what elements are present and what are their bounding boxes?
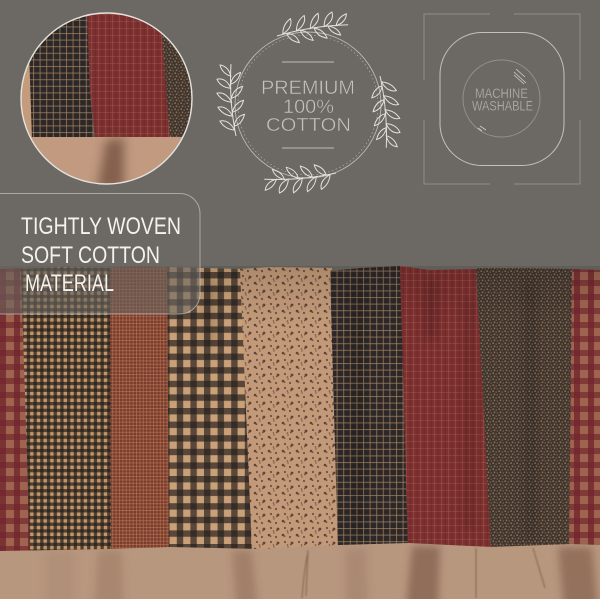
fabric strip: red plaid right: [569, 269, 600, 552]
rounded square: [440, 32, 564, 166]
fabric strip: navy check: [330, 266, 409, 552]
fabric strip: red plaid left: [0, 268, 32, 552]
premium text: 100%: [283, 97, 334, 118]
callout panel: [0, 194, 200, 314]
premium text: COTTON: [266, 115, 351, 135]
rules: [282, 62, 334, 148]
panel box: [0, 194, 200, 314]
circle: brown dotted: [162, 34, 192, 137]
circle: ring: [21, 13, 192, 184]
fabric strip: red check: [400, 266, 492, 552]
circle: navy check: [28, 10, 94, 140]
badge: premium cotton: [215, 9, 402, 195]
glints: [478, 69, 526, 131]
fabric strip: rust check: [110, 266, 170, 552]
callout text: MATERIAL: [25, 270, 114, 297]
callout text: SOFT COTTON: [21, 242, 160, 269]
machine washable text: [472, 86, 533, 114]
circle: ruffle fold: [97, 138, 124, 190]
wreath circle: [235, 32, 381, 178]
wreath branches: [215, 9, 402, 195]
fabric strip: small gingham: [21, 267, 112, 552]
callout text: [21, 213, 181, 297]
callout text: TIGHTLY WOVEN: [21, 213, 181, 240]
fabric strip: floral tan: [240, 267, 339, 552]
detail circle: [20, 10, 195, 190]
premium text: PREMIUM: [261, 78, 355, 99]
curtain photo: [0, 266, 600, 599]
premium text: [261, 78, 355, 135]
circle: ruffle: [32, 137, 182, 184]
machine washable text: WASHABLE: [472, 98, 533, 114]
circle: red check: [87, 10, 170, 140]
fabric strip: brown dotted: [476, 268, 572, 552]
badge: machine washable: [424, 14, 580, 184]
circle: tan sliver: [22, 63, 32, 137]
corner frame: [424, 14, 580, 184]
inner circle: [463, 60, 540, 137]
top gathers shading: [0, 266, 600, 324]
fabric folds: [205, 280, 535, 540]
fabric strip: large gingham: [167, 267, 258, 552]
ruffle folds: [45, 546, 598, 599]
machine washable text: MACHINE: [475, 86, 528, 101]
ruffle: [0, 543, 600, 599]
